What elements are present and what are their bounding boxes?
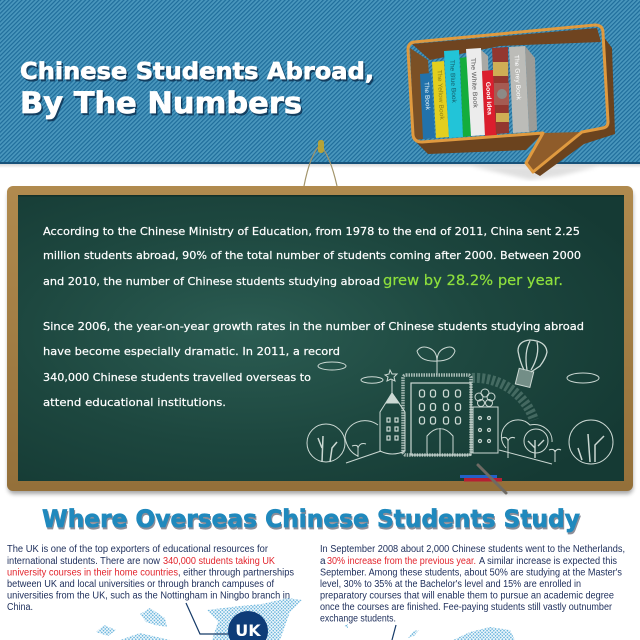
title: By The Numbers — [20, 86, 302, 120]
right trees — [569, 420, 613, 464]
book: The Blue Book: The Blue Book — [448, 60, 457, 104]
title: Chinese Students Abroad, — [20, 59, 374, 85]
text block: Netherlands: exchange students. — [320, 614, 396, 624]
heading: where overseas Chinese students study: Where Overseas Chinese Students Study — [43, 507, 581, 535]
book: The Yellow Book — [432, 61, 449, 138]
ground lines — [346, 450, 552, 464]
text block: chalk paragraph 2: have become especially dramatic. In 2011, a record — [43, 345, 340, 358]
left trees — [307, 424, 345, 462]
book: The Yellow Book: The Yellow Book — [436, 70, 445, 121]
map: Netherlands region — [344, 624, 515, 640]
side building — [473, 407, 498, 453]
text block: Netherlands: a — [320, 556, 326, 567]
book: green — [460, 57, 471, 137]
text block: UK: international students. There are now — [7, 556, 161, 567]
text block: Netherlands — [320, 544, 625, 624]
pencil tower — [380, 393, 405, 454]
text block: chalk paragraph 1: According to the Chinese Ministry of Education, from 1978 to the end of 2011, China sent 2.25 — [43, 225, 580, 238]
header band — [0, 0, 640, 168]
text block: UK: universities from the UK, such as the Nottingham in Ningbo branch in — [7, 590, 290, 602]
book: The Grey Book: The Grey Book — [513, 55, 522, 101]
book: Good Idea — [482, 70, 497, 136]
clouds — [318, 362, 346, 370]
text block: Netherlands: preparatory courses that will enable them to pursue an academic degree — [320, 590, 614, 602]
text block: UK — [7, 544, 294, 613]
icon: hanging nail and wire — [304, 140, 337, 186]
title: By The Numbers — [22, 88, 304, 122]
text block: UK: university courses in their home countries — [7, 568, 178, 578]
map: UK region — [96, 598, 302, 640]
text block: chalk paragraph 1: and 2010, the number of Chinese students studying abroad — [43, 275, 380, 288]
title: Chinese Students Abroad, — [22, 61, 376, 87]
book: The Blue Book — [444, 50, 463, 138]
book: The Book: The Book — [423, 82, 431, 111]
book: The White Book — [466, 48, 490, 136]
callout: UK marker: UK — [235, 621, 261, 640]
callout: UK marker — [186, 603, 268, 640]
windows — [420, 390, 460, 424]
rainbow — [472, 378, 534, 420]
parachute — [518, 340, 547, 372]
text block: Netherlands: A similar increase is expected this — [479, 556, 617, 567]
text block: UK: between UK and local universities or through branch campuses of — [7, 579, 274, 590]
book: The Grey Book — [509, 46, 537, 133]
heading: where overseas Chinese students study: Where Overseas Chinese Students Study — [42, 505, 580, 533]
text block: Netherlands: once the courses are finished. Fee-paying students still vastly outnumber — [320, 602, 613, 613]
book: Good Idea: Good Idea — [484, 82, 493, 115]
text block: UK: China. — [7, 602, 33, 613]
text block: UK: 340,000 students taking UK — [163, 556, 275, 567]
text block: chalk paragraph 2: Since 2006, the year-on-year growth rates in the number of Chinese students studying abroad — [43, 320, 584, 333]
text block: chalk paragraph 1 — [43, 225, 581, 289]
text block: chalk paragraph 1: grew by 28.2% per year. — [383, 273, 563, 289]
book: The Book — [420, 73, 435, 139]
main building — [403, 375, 471, 455]
icon: speech bubble bookshelf — [408, 25, 615, 180]
text block: chalk paragraph 2: attend educational institutions. — [43, 396, 226, 409]
text block: Netherlands: level, 30% to 35% at the Bachelor's level and 15% are enrolled in — [320, 579, 581, 590]
book: The White Book: The White Book — [469, 58, 479, 109]
text block: Netherlands: 30% increase from the previous year. — [327, 556, 476, 567]
panel: chalkboard — [7, 186, 633, 494]
text block: chalk paragraph 1: million students abroad, 90% of the total number of students coming after 2000. Between 2000 — [43, 249, 581, 262]
title — [20, 59, 376, 122]
book: ornate — [492, 47, 509, 134]
illustration: chalk town — [307, 340, 613, 464]
callout: Netherlands marker line — [392, 625, 396, 640]
shelf outline — [408, 25, 608, 172]
door — [427, 428, 453, 455]
icon: chalk pieces and eraser — [460, 465, 506, 493]
sprout — [417, 347, 455, 375]
text block: chalk paragraph 2 — [43, 320, 584, 409]
text block: chalk paragraph 2: 340,000 Chinese students travelled overseas to — [43, 371, 311, 384]
text block: UK: The UK is one of the top exporters of educational resources for — [7, 544, 269, 555]
text block: UK: , either through partnerships — [178, 568, 294, 578]
